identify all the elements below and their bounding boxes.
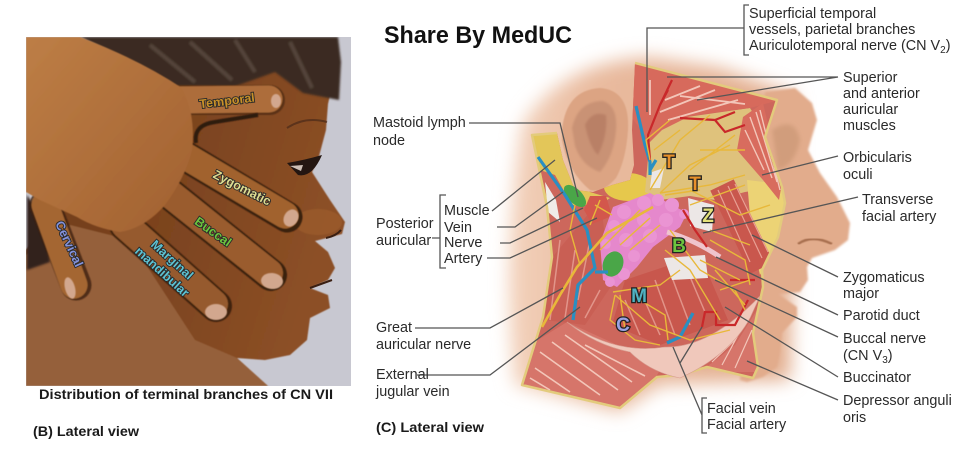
- hair: [27, 37, 341, 270]
- eye: [287, 155, 322, 175]
- neck deep tissue: [546, 221, 605, 322]
- cheek fat: [747, 180, 784, 275]
- finger label: Marginal mandibular: mandibular: [132, 244, 192, 300]
- nerve branch letter: Z: Z: [702, 206, 714, 227]
- label: depressor anguli oris: Depressor anguli: [843, 393, 952, 409]
- platysma fibres: [530, 335, 645, 395]
- label: transverse facial artery: Transverse: [862, 192, 933, 208]
- finger label: Buccal: Buccal: [192, 214, 234, 250]
- label: facial vein and artery: Facial vein: [707, 401, 776, 417]
- heading: Share By MedUC: Share By MedUC: [384, 22, 572, 49]
- label: mastoid lymph node: node: [373, 133, 405, 149]
- nerve branch letter: C: C: [616, 315, 630, 336]
- label: superficial temporal vessels and auriculotemporal nerve: vessels, parietal branches: [749, 22, 915, 38]
- label: parotid duct: [716, 257, 920, 324]
- photo background: [26, 37, 351, 386]
- label: superficial temporal vessels and auriculotemporal nerve: ): [946, 38, 951, 54]
- label: great auricular nerve: [376, 288, 563, 353]
- nerve branch letter: M: M: [631, 286, 647, 307]
- finger label: Zygomatic: Zygomatic: [211, 167, 273, 209]
- eye socket shadow: [772, 124, 800, 170]
- label: external jugular vein: External: [376, 367, 429, 383]
- label: transverse facial artery: facial artery: [862, 209, 937, 225]
- woman's face and neck: [26, 60, 345, 386]
- nerve branch letter: T upper: T: [663, 152, 675, 173]
- lower neck platysma: [524, 322, 658, 406]
- white fascia over cheek: [650, 168, 714, 280]
- label: posterior auricular group: Artery: [444, 251, 483, 267]
- depressor fibres: [712, 330, 752, 368]
- nostril and mouth: [310, 230, 341, 288]
- label: great auricular nerve: auricular nerve: [376, 337, 471, 353]
- temporal and auricular muscles: [632, 62, 780, 142]
- label: superior and anterior auricular muscles: and anterior: [843, 86, 920, 102]
- masseter muscle: [612, 255, 728, 345]
- label: superior and anterior auricular muscles: [667, 70, 920, 134]
- pale fascial band: [567, 296, 760, 378]
- label: orbicularis oculi: [762, 150, 912, 183]
- panel: head dissection illustration: [509, 50, 850, 420]
- label: posterior auricular group: Posterior: [376, 216, 434, 232]
- label: posterior auricular group: Muscle: [444, 203, 490, 219]
- window base muscle: [537, 64, 776, 376]
- finger label: Marginal mandibular: Marginal: [148, 237, 196, 283]
- hand and fingers: [26, 37, 287, 306]
- parotid lymph node: [599, 248, 627, 280]
- label: depressor anguli oris: oris: [843, 410, 866, 426]
- label: posterior auricular group: [376, 160, 597, 268]
- red muscle near mastoid: [584, 196, 612, 224]
- label: great auricular nerve: Great: [376, 320, 412, 336]
- parotid gland: [600, 193, 689, 287]
- label: superficial temporal vessels and auriculotemporal nerve: Superficial temporal: [749, 6, 876, 22]
- label: orbicularis oculi: oculi: [843, 167, 873, 183]
- label: posterior auricular group: Vein: [444, 220, 472, 236]
- label: buccinator: [725, 307, 911, 386]
- ear: [562, 88, 628, 191]
- zygomaticus fibres: [718, 184, 768, 262]
- window yellow border: [522, 63, 785, 408]
- label: posterior auricular group: auricular: [376, 233, 431, 249]
- finger label: Cervical: Cervical: [52, 219, 86, 269]
- label: facial vein and artery: Facial artery: [707, 417, 787, 433]
- zygomaticus major muscle: [722, 185, 762, 268]
- label: buccal nerve: ): [888, 348, 893, 364]
- arteries: [648, 80, 755, 327]
- label: zygomaticus major: [752, 235, 925, 302]
- eyebrow: [287, 120, 327, 128]
- parotid duct: [667, 232, 720, 257]
- label: transverse facial artery: [703, 192, 937, 233]
- label: buccal nerve: [715, 280, 926, 366]
- thumb web shadow: [196, 115, 258, 143]
- label: superficial temporal vessels and auriculotemporal nerve: 2: [940, 45, 946, 56]
- nose wing: [798, 239, 832, 244]
- head skin halo: [509, 57, 795, 412]
- fat under the ear: [532, 133, 610, 205]
- label: superior and anterior auricular muscles: Superior: [843, 70, 898, 86]
- label: external jugular vein: [375, 307, 580, 400]
- label: mastoid lymph node: [373, 115, 578, 197]
- label: buccinator: Buccinator: [843, 370, 911, 386]
- label: orbicularis oculi: Orbicularis: [843, 150, 912, 166]
- white fascia left: [545, 182, 560, 222]
- panel: photo of hand on face, lateral view: [26, 37, 351, 386]
- fingernails: [62, 94, 302, 320]
- eye white: [290, 165, 303, 171]
- parotid fat: [604, 173, 652, 201]
- depressor anguli oris: [708, 312, 756, 372]
- finger label: Temporal: Temporal: [198, 91, 256, 111]
- top left muscle stump: [538, 142, 565, 170]
- orbicularis oculi muscle: [737, 103, 782, 200]
- auricular fibres: [650, 80, 745, 120]
- label: posterior auricular group: Nerve: [444, 235, 482, 251]
- nerve branch letter: T lower: T: [689, 174, 701, 195]
- dissection window: [524, 64, 784, 406]
- label: buccal nerve: 3: [882, 355, 888, 366]
- label: zygomaticus major: Zygomaticus: [843, 270, 925, 286]
- nerves: [542, 115, 770, 345]
- label: superficial temporal vessels and auriculotemporal nerve: [647, 5, 951, 112]
- label: depressor anguli oris: [747, 361, 952, 426]
- caption: distribution of terminal branches: Distribution of terminal branches of CN VII: [39, 386, 333, 402]
- label: superficial temporal vessels and auriculotemporal nerve: Auriculotemporal nerve (CN V: [749, 38, 940, 54]
- nerve branch letter: B: B: [672, 236, 686, 257]
- label: buccal nerve: (CN V: [843, 348, 882, 364]
- head skin front profile: [740, 88, 850, 382]
- label: superior and anterior auricular muscles: auricular: [843, 102, 898, 118]
- lymph node: [560, 181, 590, 211]
- orbicularis fibres: [745, 110, 780, 190]
- label: parotid duct: Parotid duct: [843, 308, 920, 324]
- muscle fibres: [549, 240, 706, 336]
- veins: [538, 106, 693, 343]
- label: facial vein and artery: [673, 327, 787, 433]
- label: buccal nerve: Buccal nerve: [843, 331, 926, 347]
- label: superior and anterior auricular muscles: muscles: [843, 118, 896, 134]
- caption: (C) lateral view: (C) Lateral view: [376, 419, 484, 435]
- caption: (B) lateral view: (B) Lateral view: [33, 423, 139, 439]
- label: mastoid lymph node: Mastoid lymph: [373, 115, 466, 131]
- label: zygomaticus major: major: [843, 286, 879, 302]
- label: external jugular vein: jugular vein: [375, 384, 450, 400]
- temple fat: [645, 108, 772, 200]
